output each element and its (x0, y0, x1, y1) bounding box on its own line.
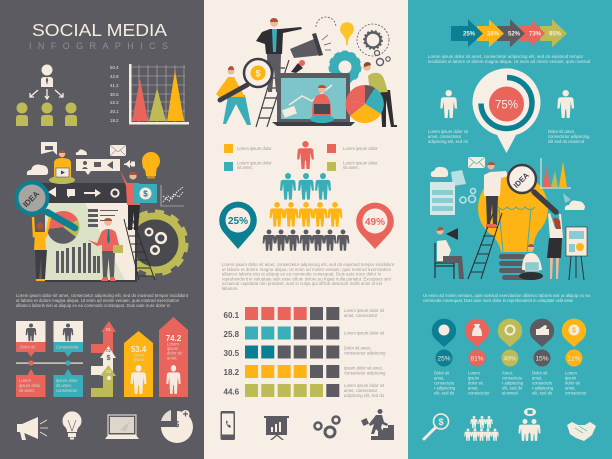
person right (557, 90, 574, 118)
pin: dollar 12%: 12% (567, 356, 581, 362)
man with magnifier (216, 59, 272, 125)
row 25.8: 25.8 (224, 330, 240, 339)
row 18.2: consectetur adipiscing (344, 370, 386, 376)
man on ladder pointing (256, 18, 302, 92)
ladder (256, 60, 289, 127)
arrow sequence: 38% (487, 32, 500, 38)
man on ladder (484, 162, 508, 227)
legend: sit amet, (237, 165, 253, 170)
pin captions: consectetu (532, 380, 553, 386)
row 18.2: Ipsum dolor sit amet, (344, 366, 383, 370)
mini line chart (161, 185, 184, 206)
red stat arrow 74.2: Lorem (167, 342, 179, 346)
pin captions: amet, (532, 376, 542, 380)
text block: ut labore et dolore magna aliqua. Ut enim ad minim veniam, quis nostrud exercitation (222, 267, 392, 272)
right caption: Dolor sit amet, (548, 129, 575, 134)
pin: 25% (219, 202, 257, 249)
pin captions: Lorem (565, 370, 577, 376)
man on ladder with dollar card: $ (143, 190, 148, 198)
pin captions: Lorem (468, 370, 480, 376)
woman with skirt (547, 213, 563, 279)
magnifier (508, 165, 556, 212)
left caption: Lorem ipsum dolor sit (428, 129, 469, 134)
text block: occaecat cupidatat non proident, sunt in culpa qui officia deserunt mollit anim id est (222, 281, 383, 286)
pin captions: Amet, (502, 370, 513, 376)
pin: gear 49% (498, 319, 522, 366)
pin captions: amet, (434, 376, 444, 380)
text block (16, 293, 189, 308)
icon: dollar pie: $ (175, 420, 180, 429)
text block: laborum. (222, 286, 238, 291)
timeline cards (16, 321, 83, 397)
yellow stat arrow 53.4 (124, 331, 153, 397)
stepped arrows: 02 (106, 348, 112, 353)
pin: 49% (356, 203, 394, 249)
text block: Lorem ipsum dolor sit amet, consectetur adipiscing elit, sed do eiusmod tempor incididunt (222, 262, 395, 267)
pin captions: eiusmod (502, 390, 518, 396)
row 18.2: 18.2 (224, 368, 240, 377)
title: INFOGRAPHICS (29, 41, 168, 51)
icon: gears (314, 416, 340, 437)
left caption: amet, consectetur (428, 134, 462, 139)
row 44.6: adipiscing elit, sed do (344, 393, 385, 398)
red stat arrow 74.2: 74.2 (166, 334, 182, 343)
icon: handshake (567, 422, 596, 441)
lower card teal: ipsum dolor (56, 378, 78, 383)
text block: Ut enim ad minim veniam, quis nostrud exercitation ullamco laboris nisi ut aliquip ex ea (423, 293, 591, 298)
lower card red: Lorem (19, 378, 31, 383)
illustration: marketing team (216, 17, 397, 127)
row 30.5: 30.5 (224, 349, 240, 358)
pin: dollar 12%: $ (572, 328, 576, 334)
yellow stat arrow 53.4: Lorem (133, 352, 145, 358)
pin captions: dolor sit (565, 380, 580, 386)
man with magnifier: $ (255, 68, 261, 78)
legend: Lorem ipsum dolor (343, 146, 378, 151)
card: consectetur: Consectetur (56, 344, 79, 350)
icon: red person (297, 141, 314, 169)
card: dolor sit: Dolor sit (20, 344, 36, 350)
magnifier with idea (16, 182, 75, 228)
megaphone with hand (290, 33, 331, 73)
icon: group of people (464, 416, 499, 441)
dark row (263, 230, 349, 251)
person with laptop (310, 85, 334, 123)
legend (224, 144, 378, 171)
panel: middle cream column (204, 0, 408, 459)
arrow sequence: 73% (529, 32, 542, 38)
lower card red: ipsum dolor (19, 383, 41, 388)
pin: thumbs up 15%: 15% (535, 356, 549, 362)
icon: phone (220, 411, 235, 440)
text block (428, 54, 591, 64)
man on ladder with dollar card (120, 170, 157, 230)
text block: ut labore et dolore magna aliqua. Ut enim ad minim veniam, quis nostrud exercitation (16, 298, 180, 303)
arrow sequence: 25% (463, 32, 476, 38)
lower card red: sit amet, (19, 388, 35, 393)
stepped arrows (91, 321, 116, 397)
magnifier: IDEA (512, 170, 531, 190)
timeline line (16, 360, 83, 366)
pin: thumbs up 15% (530, 319, 554, 366)
big pin: 75%: 75% (495, 100, 518, 112)
text block (222, 262, 395, 291)
pin captions: r adipiscing (532, 386, 554, 390)
left caption (428, 129, 469, 144)
man behind pie chart (363, 62, 397, 127)
lower card teal: consectetur (56, 388, 78, 393)
lower card red (16, 369, 46, 397)
icon: man climbing stairs (361, 409, 394, 440)
magnifier with idea: IDEA (21, 189, 41, 209)
stepped arrows: 03 (106, 369, 112, 374)
icon: megaphone (17, 417, 48, 440)
legend: Lorem ipsum dolor (343, 160, 378, 166)
pin: money bag 81%: 81% (470, 356, 484, 362)
people pyramid (263, 173, 349, 251)
pin captions: dolor sit (468, 380, 483, 386)
yellow stat arrow 53.4: 53.4 (131, 345, 147, 354)
triangle chart: 30.5 (110, 92, 119, 97)
sitting person with laptop (49, 150, 75, 184)
title: SOCIAL MEDIA (32, 20, 167, 40)
pin captions: ipsum (468, 376, 480, 380)
pin: 25%: 25% (228, 216, 248, 227)
pin captions: r adipiscing (434, 386, 456, 390)
triangle chart: 22.3 (110, 100, 119, 105)
olive gear (124, 212, 186, 274)
big pin: 75% (472, 68, 541, 153)
triangle chart: 42.8 (110, 74, 119, 79)
pie chart (346, 85, 384, 123)
red stat arrow 74.2: amet, (167, 356, 177, 360)
triangle chart: 18.2 (110, 118, 119, 123)
row 60.1: Lorem ipsum dolor sit (344, 308, 385, 313)
pin: gear 49%: 49% (503, 356, 517, 362)
yellow stat arrow 53.4: ipsum (133, 357, 145, 362)
icon: light bulb (62, 411, 82, 440)
text block: ullamco laboris nisi ut aliquip ex ea commodo consequat. Duis aute irure dolor in (222, 272, 382, 276)
legend: Lorem ipsum dolor (237, 160, 272, 166)
triangle chart: 50.4 (110, 65, 119, 70)
pin: clock 25%: 25% (437, 356, 451, 362)
text block: commodo consequat. Duis aute irure dolor in reprehenderit in voluptate velit esse (423, 298, 574, 303)
row 44.6: amet, consectetur (344, 388, 378, 393)
pin: money bag 81% (465, 319, 489, 366)
triangle chart: 41.2 (110, 83, 119, 88)
icon: laptop (105, 415, 139, 439)
laptop (272, 73, 355, 126)
red stat arrow 74.2 (159, 317, 188, 397)
triangle chart (110, 64, 189, 124)
lower card teal (54, 369, 83, 397)
pin captions: amet, (565, 386, 575, 390)
pin captions: ipsum (565, 376, 577, 380)
pin captions: amet, (468, 386, 478, 390)
row 44.6 (224, 383, 385, 398)
text block: incididunt ut labore et dolore magna aliqua. Ut enim ad minim veniam, quis nostrud (428, 59, 591, 64)
text block: Lorem ipsum dolor sit amet, consectetur adipiscing elit, sed do eiusmod tempor (428, 54, 584, 59)
icon: presentation board (264, 416, 289, 440)
icon: couple talking (518, 408, 541, 441)
row 18.2 (224, 365, 386, 378)
ladder (124, 218, 155, 280)
row 60.1: 60.1 (224, 311, 240, 320)
illustration: team with idea board (16, 142, 186, 282)
title (29, 20, 168, 51)
row 25.8: Lorem ipsum dolor sit (344, 330, 385, 336)
org chart icon (16, 64, 77, 126)
pin stats row (432, 319, 586, 366)
icon group: gears and bulb (316, 17, 390, 82)
presentation board (40, 183, 137, 282)
pin captions (434, 370, 587, 396)
woman holding magnifier (33, 217, 50, 281)
text block (423, 293, 591, 303)
arrow sequence (451, 19, 567, 47)
pin captions: elit, sed do (434, 390, 455, 396)
text block: ullamco laboris nisi ut aliquip ex ea commodo consequat. Duis aute irure dolor in (16, 303, 171, 308)
row 30.5: consectetur adipiscing (344, 350, 386, 356)
pin captions: consectetu (434, 380, 455, 386)
clouds, envelope and documents (430, 157, 585, 215)
flip chart (566, 227, 587, 280)
legend: sit amet, (343, 165, 359, 170)
row 25.8 (224, 326, 385, 340)
ladder (468, 213, 502, 279)
light bulb (478, 173, 548, 280)
man with megaphone on chair (435, 227, 464, 279)
triangle chart: 20.1 (110, 109, 119, 114)
right caption: elit sed do eiusmod (548, 139, 585, 144)
floating icons: speech boxes, clouds, envelope, bulb (27, 142, 160, 178)
square rating chart (224, 307, 386, 398)
legend: Lorem ipsum dolor (237, 146, 272, 151)
red stat arrow 74.2: dolor sit (167, 350, 182, 356)
pin captions: elit, sed do (502, 386, 523, 390)
pin captions: consectetu (502, 376, 523, 380)
pin: clock 25% (432, 319, 456, 366)
row 44.6: 44.6 (224, 388, 240, 396)
lower card teal: sit amet, (56, 383, 72, 388)
pin captions: consectetur (468, 390, 490, 396)
man pointing at chart (88, 218, 123, 281)
text block: Lorem ipsum dolor sit amet, consectetur adipiscing elit, sed do eiusmod tempor incididunt (16, 293, 189, 298)
yellow row (270, 202, 342, 227)
row 30.5: Dolor sit amet, (344, 346, 371, 350)
row 44.6: Lorem ipsum dolor sit (344, 383, 385, 388)
teal row (280, 173, 331, 200)
pin captions: Dolor sit (532, 370, 548, 376)
right caption (548, 129, 590, 144)
person left (440, 90, 457, 118)
mini triangle chart (541, 158, 571, 188)
red stat arrow 74.2: ipsum (167, 346, 179, 351)
pin captions: Dolor sit (434, 370, 450, 376)
left caption: adipiscing elit, sed do (428, 139, 469, 144)
icon: dollar magnifier: $ (438, 417, 444, 427)
row 60.1 (224, 307, 385, 320)
icon: dollar magnifier (424, 414, 448, 439)
panel: right teal column (408, 0, 612, 459)
panel: left dark column (0, 0, 204, 459)
pin captions: elit, sed do (532, 390, 553, 396)
pin captions: r adipiscing (502, 380, 524, 386)
right caption: consectetur adipiscing (548, 134, 590, 139)
illustration: big idea bulb team (430, 157, 587, 280)
arrow sequence: 52% (508, 32, 521, 38)
pin: dollar 12% (562, 319, 586, 366)
stepped arrows: $ (107, 355, 111, 362)
person with laptop (519, 244, 543, 280)
icon: dollar pie (161, 410, 193, 443)
pin captions: consectetur (565, 390, 587, 396)
text block: reprehenderit in voluptate velit esse cillum dolore eu fugiat nulla pariatur. Excepteur sint (222, 276, 392, 282)
pin: 49%: 49% (365, 217, 385, 228)
arrow sequence: 95% (549, 32, 562, 38)
row 60.1: amet, consectetur (344, 313, 378, 318)
row 30.5 (224, 346, 386, 358)
stepped arrows: 01 (106, 327, 112, 332)
